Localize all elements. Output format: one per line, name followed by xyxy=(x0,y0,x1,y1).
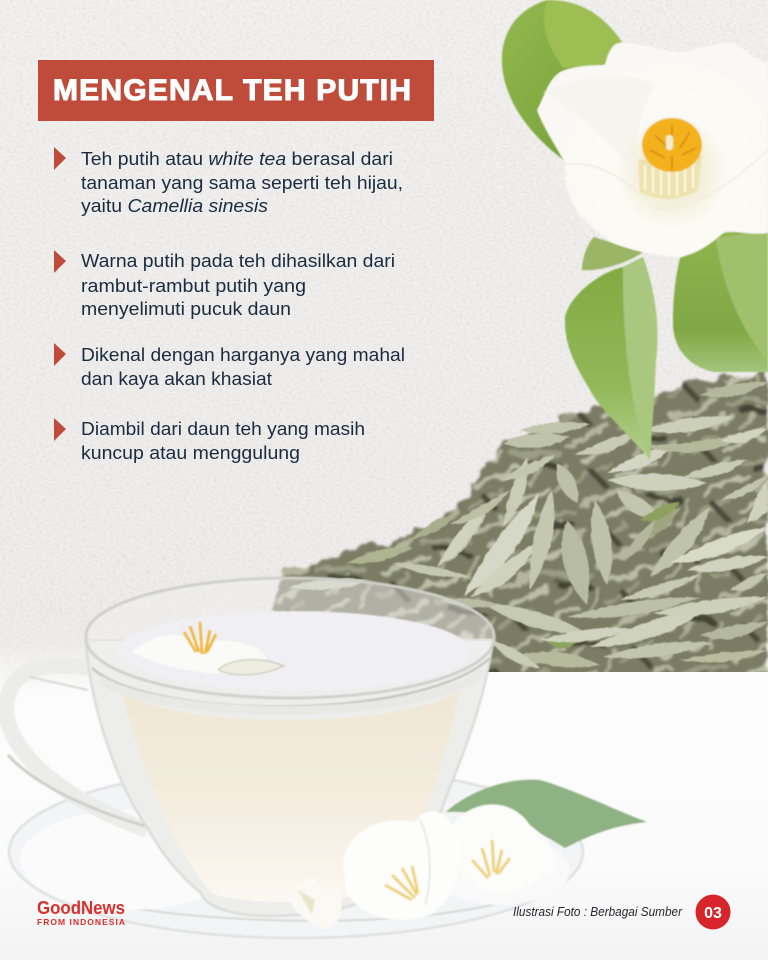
photo: lower left leaf xyxy=(565,257,657,460)
centre jasmine xyxy=(343,811,459,920)
photo: jasmine flowers on saucer xyxy=(287,804,555,928)
text: Dikenal dengan harganya yang mahal xyxy=(81,345,405,365)
title banner xyxy=(38,60,434,121)
page number badge: 03 xyxy=(704,905,722,922)
bullet 1 xyxy=(54,147,403,216)
right jasmine xyxy=(453,804,555,895)
tea xyxy=(122,690,460,902)
page number badge xyxy=(696,894,730,930)
photo: mint leaf on saucer xyxy=(446,780,647,848)
floating flower xyxy=(132,622,284,675)
small bud xyxy=(287,878,342,928)
arrow marker xyxy=(54,343,66,366)
photo: glass tea cup on saucer xyxy=(6,578,583,938)
saucer xyxy=(9,766,583,938)
photo: lower right leaf xyxy=(673,230,768,372)
bullet 2 xyxy=(54,250,395,319)
text xyxy=(81,149,403,216)
arrow marker xyxy=(54,250,66,273)
text: yaitu Camellia sinesis xyxy=(81,196,268,216)
photo: pile of white tea leaves xyxy=(268,374,768,690)
arrow marker xyxy=(54,147,66,170)
cup body xyxy=(86,640,493,916)
text: Diambil dari daun teh yang masih xyxy=(81,419,365,439)
logo: GoodNews from Indonesia: GoodNews xyxy=(37,898,125,918)
text: rambut-rambut putih yang xyxy=(81,276,306,296)
text: menyelimuti pucuk daun xyxy=(81,299,291,319)
text xyxy=(81,251,395,319)
photo: upper leaf behind flower xyxy=(502,0,622,163)
handle xyxy=(6,665,147,830)
text: kuncup atau menggulung xyxy=(81,443,300,463)
text: tanaman yang sama seperti teh hijau, xyxy=(81,173,403,193)
title banner: MENGENAL TEH PUTIH xyxy=(53,74,411,107)
source credit: Ilustrasi Foto : Berbagai Sumber xyxy=(513,905,683,919)
logo: GoodNews from Indonesia xyxy=(37,898,125,927)
text: Teh putih atau white tea berasal dari xyxy=(81,149,393,169)
liquid surface xyxy=(118,611,470,691)
bullet 4 xyxy=(54,418,365,463)
rim xyxy=(86,578,494,698)
logo: GoodNews from Indonesia: FROM INDONESIA xyxy=(37,917,125,927)
photo: flower bud xyxy=(582,237,643,270)
photo: white camellia flower xyxy=(537,43,768,257)
text: dan kaya akan khasiat xyxy=(81,369,272,389)
bullet 3 xyxy=(54,343,405,389)
text xyxy=(81,345,405,389)
text: Warna putih pada teh dihasilkan dari xyxy=(81,251,395,271)
arrow marker xyxy=(54,418,66,441)
text xyxy=(81,419,365,463)
